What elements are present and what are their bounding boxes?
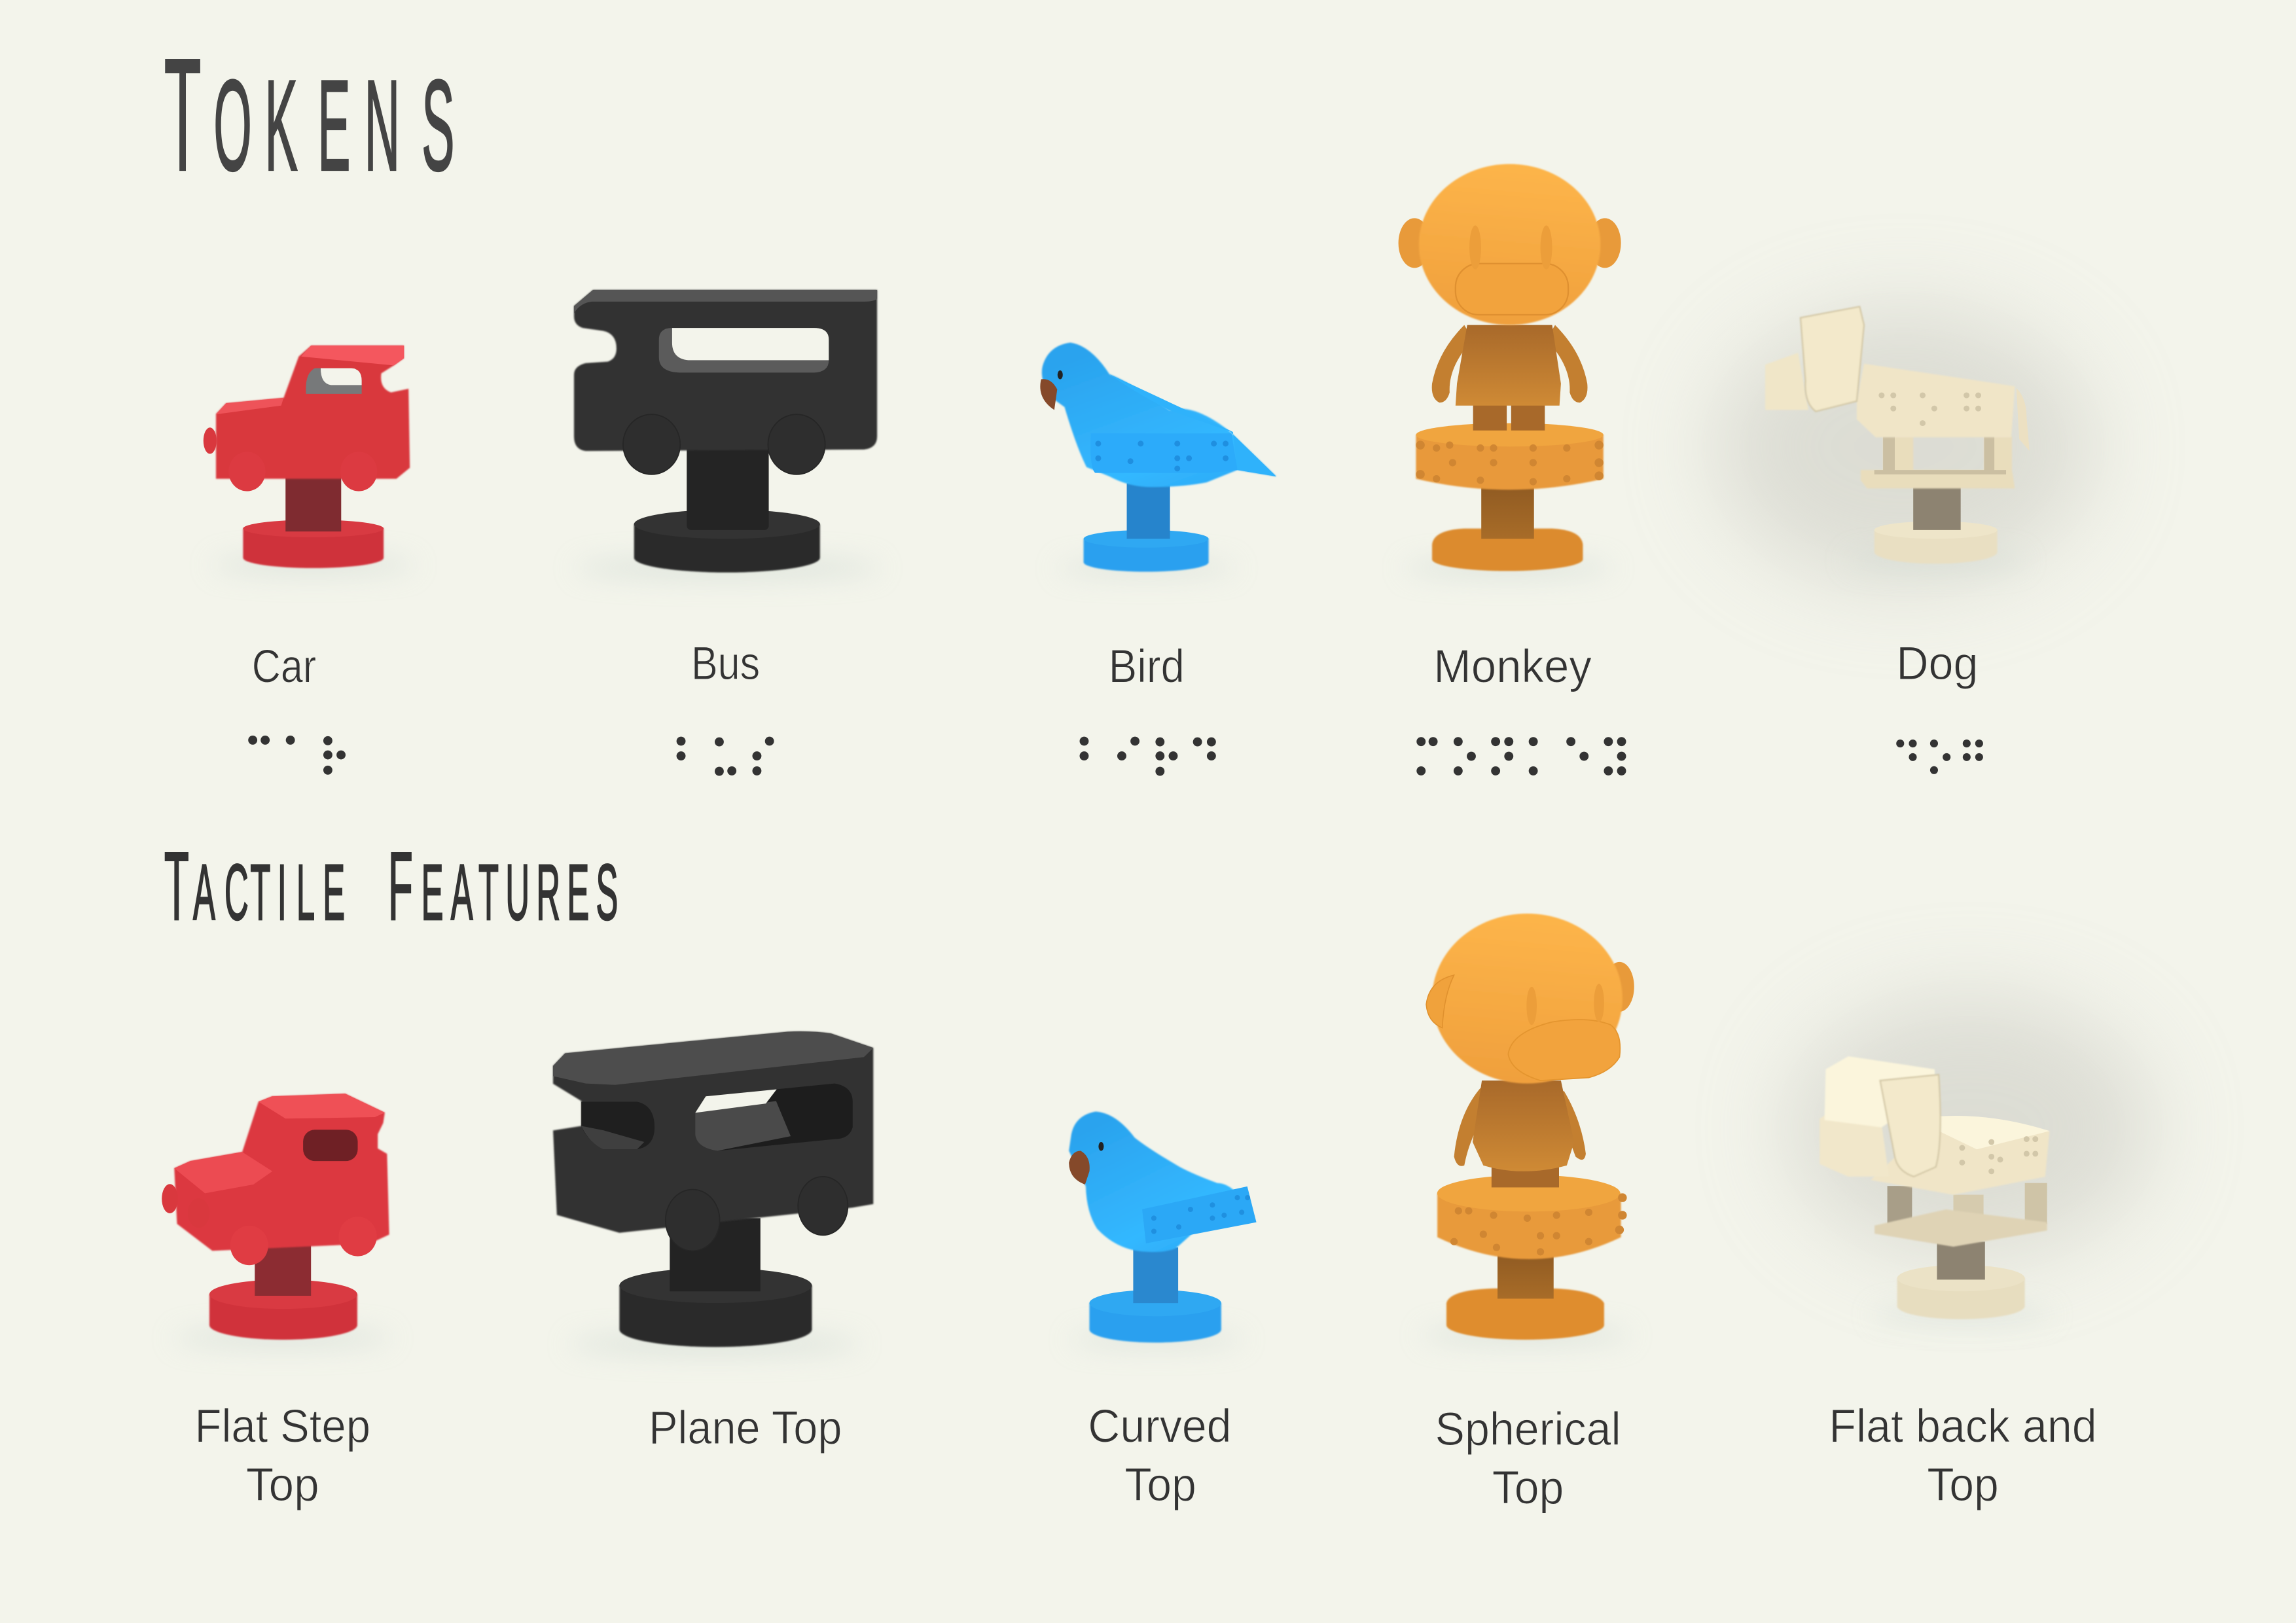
dog snout — [1820, 1101, 1889, 1177]
car window — [306, 368, 362, 394]
braille: dog — [1896, 740, 1983, 774]
dog head top — [1825, 1056, 1936, 1128]
bird wing with braille — [1090, 433, 1237, 473]
car bumpers — [162, 1184, 178, 1213]
monkey eyes — [1526, 987, 1537, 1025]
heading: Tactile Features: E — [567, 847, 589, 936]
token labels row — [252, 637, 1979, 693]
monkey torso — [1456, 325, 1561, 406]
label: Curved Top: Curved — [1088, 1400, 1232, 1453]
label: Flat Step Top: Top — [246, 1459, 319, 1511]
bird pole — [1133, 1247, 1178, 1303]
label: Flat back and Top — [1829, 1400, 2097, 1511]
bus wheels — [666, 1190, 720, 1251]
heading: Tactile Features: A — [193, 847, 215, 936]
label: Flat Step Top: Flat Step — [195, 1400, 370, 1453]
heading: Tokens: S — [422, 53, 454, 198]
dog legs — [1888, 1186, 1912, 1227]
monkey pole — [1498, 1252, 1554, 1298]
car wheels — [230, 1226, 268, 1265]
heading: Tactile Features: F — [388, 832, 413, 940]
monkey torso — [1473, 1080, 1574, 1171]
bird base — [1084, 539, 1209, 572]
bus body — [553, 1031, 873, 1233]
car wheels — [228, 452, 266, 491]
monkey left ear — [1426, 975, 1454, 1028]
bus body — [574, 290, 877, 451]
car body — [216, 346, 410, 479]
braille rows — [248, 736, 1983, 776]
bird body — [1069, 1112, 1237, 1252]
dog body with braille — [1871, 1116, 2049, 1195]
bird body — [1042, 343, 1276, 487]
label: Flat Step Top — [195, 1400, 370, 1511]
monkey base — [1432, 529, 1583, 571]
monkey braille disk — [1437, 1175, 1627, 1259]
heading: Tokens: O — [213, 53, 252, 198]
car pole — [285, 471, 341, 531]
feature: bird (three-quarter view) — [1069, 1112, 1257, 1347]
dog halo shadow — [1713, 308, 2094, 586]
label: Spherical Top: Spherical — [1435, 1403, 1621, 1455]
heading: Tactile Features: I — [278, 847, 287, 936]
braille: car — [248, 736, 346, 775]
feature: monkey (three-quarter view) — [1420, 914, 1634, 1344]
heading: Tactile Features: A — [451, 847, 473, 936]
token: monkey (front view) — [1399, 164, 1621, 577]
heading: Tactile Features: L — [296, 847, 315, 936]
car base — [209, 1294, 357, 1340]
feature: dog (three-quarter view) — [1786, 995, 2153, 1322]
monkey muzzle — [1508, 1020, 1620, 1080]
bus pole — [687, 445, 769, 530]
bird wing with braille — [1142, 1186, 1257, 1243]
label: Spherical Top: Top — [1492, 1462, 1564, 1514]
bus wheels — [623, 414, 680, 474]
heading: Tactile Features: T — [164, 832, 189, 940]
token: bus (front view) — [574, 290, 882, 579]
bus pole — [670, 1218, 761, 1291]
dog base — [1874, 530, 1998, 563]
monkey head — [1419, 164, 1600, 325]
heading: Tactile Features: E — [422, 847, 443, 936]
monkey ears — [1399, 218, 1431, 268]
token: car (front view) — [204, 346, 416, 574]
monkey head — [1432, 914, 1623, 1084]
monkey pole — [1481, 483, 1534, 539]
bus window — [659, 328, 829, 372]
monkey eyes — [1469, 226, 1481, 270]
heading: Tactile Features: C — [224, 847, 249, 936]
dog platform — [1874, 1209, 2047, 1247]
monkey arms — [1432, 325, 1473, 402]
bus window — [695, 1084, 853, 1150]
dog body with braille — [1857, 364, 2015, 437]
monkey arms — [1454, 1086, 1496, 1166]
bus base — [634, 524, 820, 573]
monkey legs — [1473, 404, 1507, 431]
heading: Tokens: T — [164, 26, 201, 204]
dog pole — [1913, 486, 1961, 530]
monkey right ear — [1605, 962, 1634, 1012]
monkey base — [1446, 1289, 1604, 1340]
dog snout — [1765, 353, 1808, 410]
bird eye — [1098, 1142, 1103, 1150]
dog platform and legs — [1861, 437, 2015, 488]
heading: Tactile Features: R — [536, 847, 560, 936]
label: Car: Car — [252, 641, 316, 693]
heading: Tactile Features: T — [478, 847, 499, 936]
token: bird (front view) — [1040, 343, 1276, 575]
label: Flat back and Top: Top — [1927, 1459, 1999, 1511]
dog halo shadow — [1786, 995, 2153, 1259]
heading: Tokens: N — [365, 53, 400, 198]
heading: Tactile Features: S — [596, 847, 618, 936]
label: Bird: Bird — [1109, 641, 1185, 693]
dog ear — [1880, 1075, 1941, 1177]
car window — [303, 1130, 358, 1161]
label: Monkey: Monkey — [1433, 641, 1592, 693]
braille: bird — [1080, 737, 1216, 776]
heading: Tactile Features: E — [323, 847, 345, 936]
bus front notch — [581, 1102, 655, 1149]
bus base — [619, 1285, 812, 1347]
car base — [243, 529, 384, 568]
heading: Tokens: E — [317, 53, 350, 198]
dog ear — [1801, 306, 1864, 412]
label: Curved Top: Top — [1124, 1459, 1196, 1511]
braille: monkey — [1416, 737, 1626, 776]
label: Flat back and Top: Flat back and — [1829, 1400, 2097, 1453]
dog base — [1897, 1278, 2025, 1319]
heading: Tactile Features: T — [250, 847, 270, 936]
label: Spherical Top — [1435, 1403, 1621, 1514]
braille: bus — [677, 737, 774, 776]
bird base — [1090, 1303, 1221, 1343]
feature: car (three-quarter view) — [162, 1094, 393, 1347]
monkey legs — [1492, 1167, 1559, 1187]
label: Dog: Dog — [1896, 637, 1979, 690]
monkey braille disk — [1416, 423, 1604, 490]
car body — [174, 1094, 389, 1251]
car bumper — [204, 427, 217, 454]
monkey muzzle — [1456, 264, 1568, 315]
heading: Tactile Features: U — [505, 847, 529, 936]
token: dog (front view) — [1713, 306, 2094, 586]
bird pole — [1127, 483, 1170, 539]
feature labels row — [195, 1400, 2097, 1514]
label: Curved Top — [1088, 1400, 1232, 1511]
label: Bus: Bus — [691, 637, 760, 690]
bird eye — [1058, 370, 1063, 379]
car pole — [255, 1237, 311, 1296]
label: Plane Top: Plane Top — [649, 1402, 842, 1454]
bird beak — [1040, 379, 1057, 410]
dog pole — [1937, 1241, 1985, 1279]
bird beak — [1069, 1150, 1090, 1185]
feature: bus (three-quarter view) — [553, 1031, 873, 1354]
heading: Tokens: K — [265, 53, 298, 198]
dog tail — [2017, 388, 2030, 451]
